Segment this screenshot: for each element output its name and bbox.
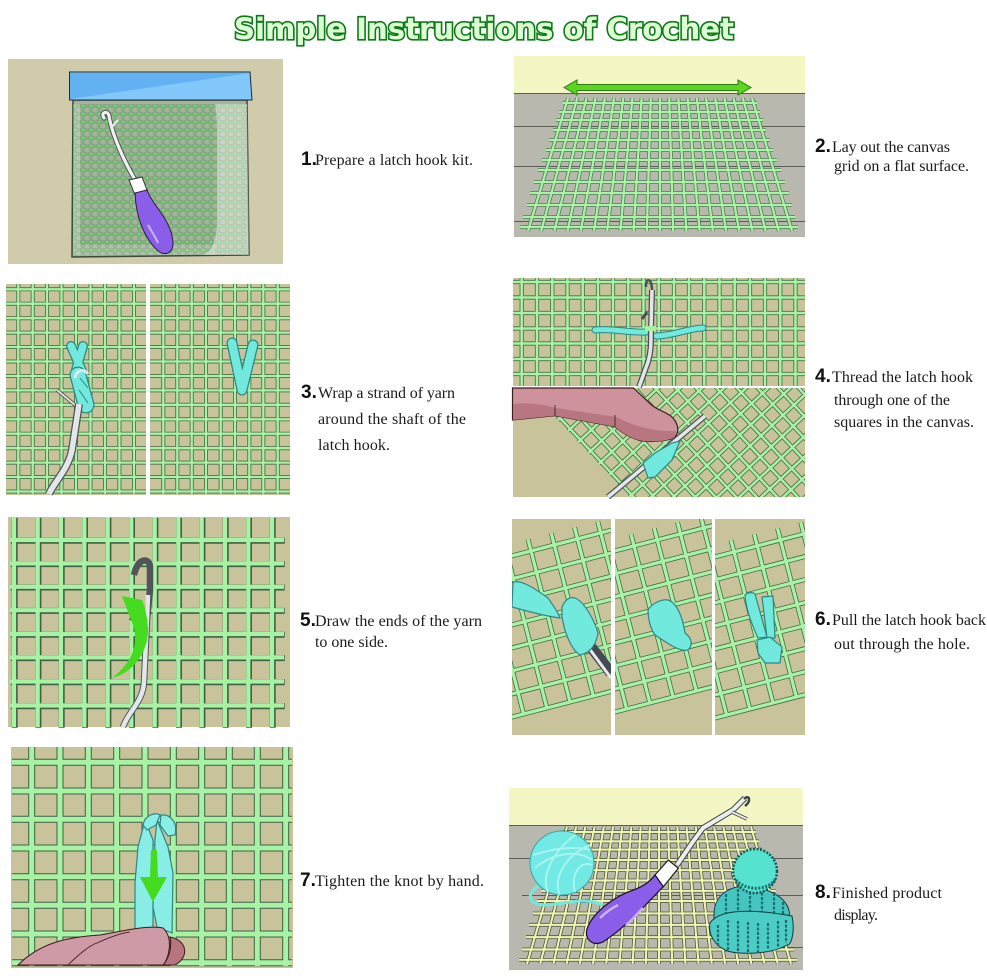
yarn knot [745,593,782,663]
arrow: width double arrow [564,80,751,95]
step 2 text: grid on a flat surface. [834,158,969,175]
bag blue header [70,72,252,100]
step 7 text: 7. [300,870,316,891]
step 8 text: display. [834,907,878,924]
step 8 text: 8. [815,882,831,903]
icon: hook [123,561,150,727]
step 4 text [815,366,974,431]
step 3 text: latch hook. [318,437,390,454]
panel: step 5 draw the yarn ends [8,517,290,728]
lower hook with yarn [608,416,705,497]
step 8 text [815,882,943,924]
step 4 text: through one of the [834,392,950,409]
step 4 text: squares in the canvas. [834,414,974,431]
step 1 text: 1. [301,149,317,170]
panel: step 8 finished product [509,788,803,970]
step 4 text: 4. [815,366,831,387]
tilted grid middle [615,519,712,714]
step 6 text: out through the hole. [834,636,970,653]
step 3 text: around the shaft of the [318,411,466,428]
arrow: down green [140,850,167,902]
arrow: curved green [112,596,148,678]
yarn strands [135,814,176,933]
panel: step 7 tighten the knot [11,747,293,968]
panel: step 3 wrap yarn [6,284,290,495]
icon: latch hook with purple handle [103,112,173,254]
step 2 text: Lay out the canvas [832,139,950,156]
canvas grid in perspective [520,98,798,231]
step 3 text [301,382,466,454]
step 2 text [815,136,969,175]
canvas grids [6,284,290,494]
panel: step 1 latch hook kit [8,59,283,264]
yarn with hook [512,582,611,678]
panel: step 4 thread the hook [512,278,805,500]
canvas grid [12,747,292,966]
step 6 text: 6. [815,609,831,630]
step 5 text: Draw the ends of the yarn [315,613,482,630]
panel: step 6 pull the hook back [512,519,805,735]
icon: yarn ball [530,831,603,905]
canvas grid [10,517,285,728]
canvas grid light [519,827,797,964]
step 5 text [300,610,482,651]
icon: hand [18,927,185,965]
yarn blob [648,600,691,650]
icon: latch hook with purple handle [586,797,749,943]
step 8 text: Finished product [832,885,943,902]
title: Simple Instructions of Crochet [234,12,734,46]
step 4 text: Thread the latch hook [832,369,973,386]
step 5 text: 5. [300,610,316,631]
step 6 text [815,609,986,653]
step 6 text: Pull the latch hook back [832,612,986,629]
yarn wrapped on hook [49,346,88,494]
top hook with yarn [595,280,703,387]
V shaped yarn [232,343,253,390]
step 3 text: Wrap a strand of yarn [318,385,455,402]
step 7 text: Tighten the knot by hand. [315,873,484,890]
step 5 text: to one side. [315,634,388,651]
plastic bag with canvas [72,100,249,257]
icon: finger [512,388,678,441]
step 2 text: 2. [815,136,831,157]
tilted grid left [512,520,611,720]
step 3 text: 3. [301,382,317,403]
panel: step 2 lay out the canvas [514,56,805,237]
diagonal canvas grid [556,388,805,497]
top canvas grid [513,278,805,386]
icon: knit hat with pompom [710,849,793,953]
tilted grid right [715,522,805,720]
step 1 text: Prepare a latch hook kit. [315,152,473,169]
